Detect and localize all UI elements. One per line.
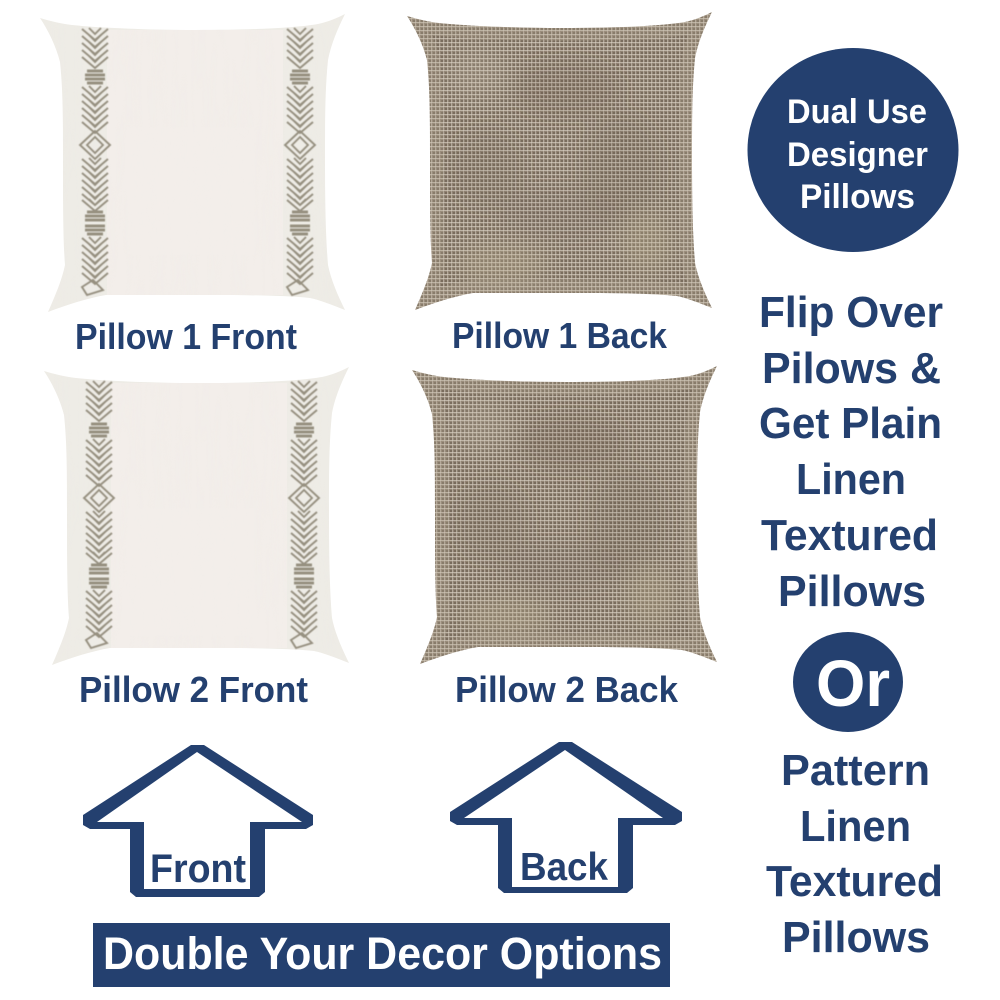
text block: pattern linen pillows	[766, 746, 943, 962]
arrow: front	[83, 745, 313, 897]
text block: flip over pillows: Flip Over	[759, 288, 943, 337]
text block: flip over pillows: Linen	[796, 455, 906, 504]
label: pillow 1 front: Pillow 1 Front	[75, 316, 297, 357]
pillow 2 back image	[412, 366, 717, 664]
badge: dual use designer pillows: Designer	[787, 136, 928, 174]
badge: dual use designer pillows: Pillows	[800, 178, 915, 216]
pillow 1 front image	[40, 14, 345, 312]
pillow 1 back image	[407, 12, 712, 310]
label: pillow 2 front: Pillow 2 Front	[79, 669, 308, 710]
label: pillow 1 back: Pillow 1 Back	[452, 315, 668, 356]
text block: pattern linen pillows: Pattern	[781, 746, 930, 795]
badge: dual use designer pillows	[748, 48, 958, 252]
arrow: front: Front	[150, 847, 246, 891]
text block: flip over pillows: Get Plain	[759, 399, 942, 448]
text block: pattern linen pillows: Pillows	[782, 913, 930, 962]
pillow 2 front image	[44, 367, 349, 665]
banner: double your decor options: Double Your Decor Options	[103, 928, 662, 979]
text block: pattern linen pillows: Linen	[800, 802, 911, 851]
text block: flip over pillows	[759, 288, 943, 616]
text block: flip over pillows: Pillows	[778, 567, 926, 616]
text block: flip over pillows: Pilows &	[762, 344, 941, 393]
text block: flip over pillows: Textured	[761, 511, 938, 560]
text block: pattern linen pillows: Textured	[766, 857, 943, 906]
arrow: back	[450, 742, 682, 893]
arrow: back: Back	[520, 846, 608, 889]
label: pillow 2 back: Pillow 2 Back	[455, 669, 679, 710]
badge: or	[793, 632, 903, 732]
badge: dual use designer pillows: Dual Use	[787, 93, 927, 131]
badge: or: Or	[816, 646, 890, 720]
